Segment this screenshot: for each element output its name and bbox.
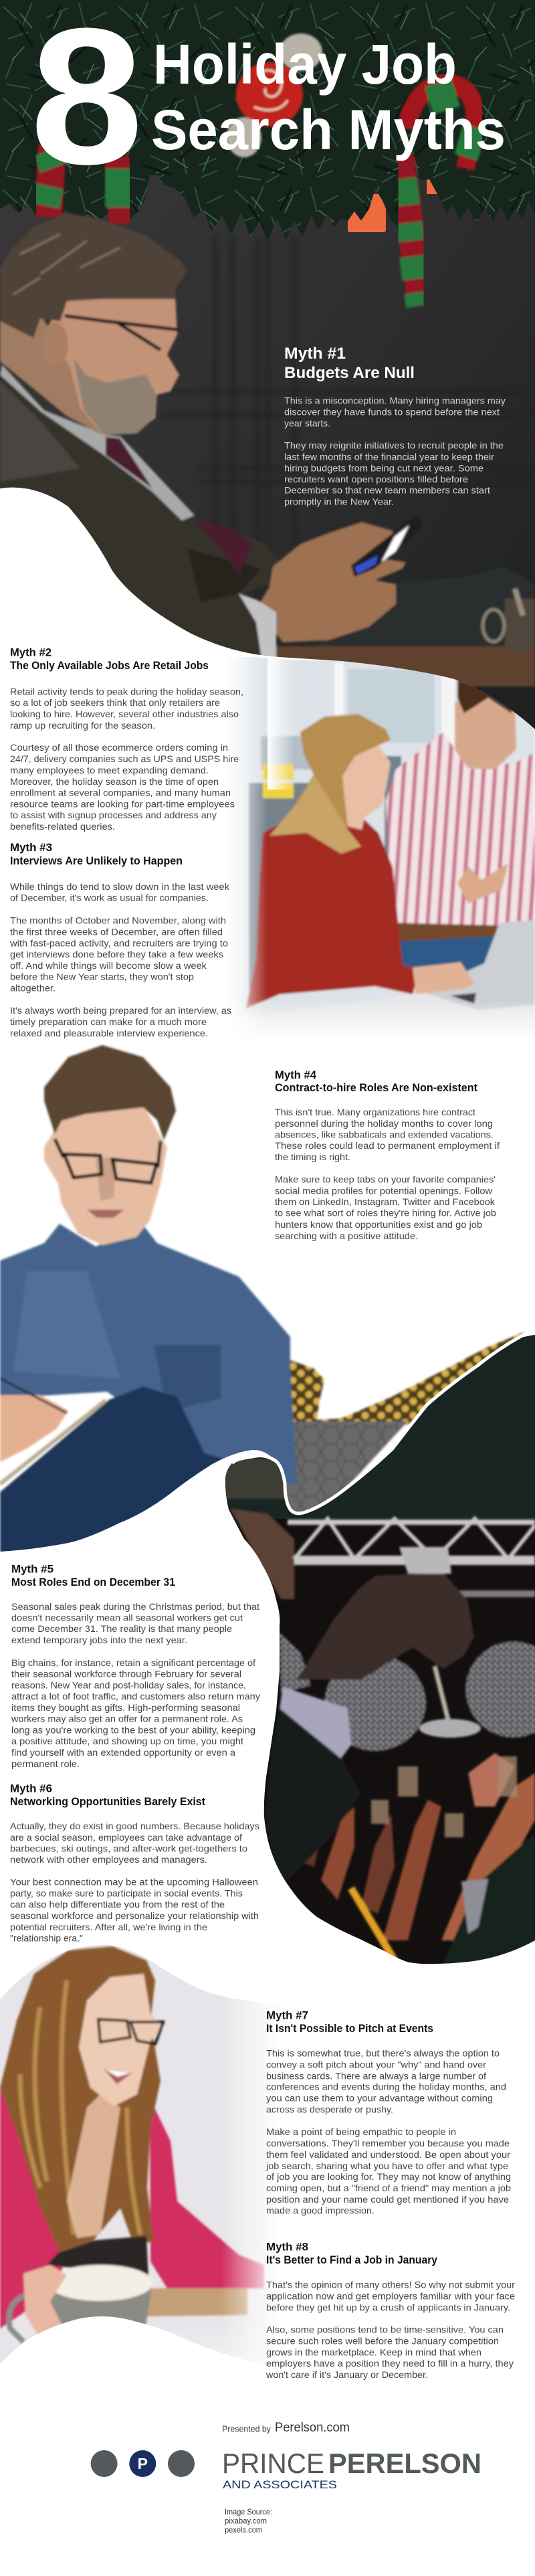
text: myth 7: business cards. There are always a large number of	[266, 2071, 486, 2081]
image source credits: pixabay.com	[225, 2516, 267, 2525]
text: myth 3: Interviews Are Unlikely to Happen	[10, 855, 183, 867]
icon: long candy cane	[401, 156, 421, 306]
text: myth 2: resource teams are looking for part-time employees	[10, 799, 235, 809]
presented by line	[222, 2421, 350, 2435]
disco ball right	[465, 1641, 535, 1738]
wooden table	[276, 646, 535, 686]
text: myth 6: Your best connection may be at the upcoming Halloween	[10, 1877, 258, 1888]
man's face and hair	[453, 680, 518, 771]
ear	[41, 323, 68, 367]
text: myth 5: find yourself with an extended opportunity or even a	[11, 1748, 235, 1758]
suit at lower right	[441, 1833, 535, 1967]
text: myth 1: This is a misconception. Many hiring managers may	[284, 395, 506, 405]
text: myth 5: a positive attitude, and showing up on time, you might	[11, 1736, 243, 1746]
suit jacket	[0, 371, 283, 662]
shirt cuff	[239, 593, 276, 662]
black top	[47, 2236, 148, 2277]
text: myth 4: Myth #4	[275, 1069, 317, 1081]
glasses	[65, 316, 179, 350]
glasses	[55, 1139, 160, 1183]
text: myth 6	[10, 1782, 259, 1943]
text: myth 8: Also, some positions tend to be time-sensitive. You can	[266, 2325, 504, 2335]
text: myth 4: These roles could lead to permanent employment if	[275, 1141, 500, 1151]
raised glasses in crowd	[371, 1756, 517, 1837]
logo: Prince Perelson and Associates	[91, 2448, 481, 2491]
phone	[351, 517, 421, 577]
text: myth 1: Myth #1	[284, 345, 346, 363]
text: myth 6: party, so make sure to participate in social events. This	[10, 1889, 243, 1899]
suit sleeve	[264, 1708, 361, 1887]
text: myth 8: secure such roles well before the January competition	[266, 2336, 499, 2347]
text: myth 5: doesn't necessarily mean all seasonal workers get cut	[11, 1613, 243, 1623]
text: myth 4: Contract-to-hire Roles Are Non-existent	[275, 1082, 477, 1094]
photo: young man with glasses writing	[0, 1045, 526, 1566]
text: myth 2: ramp up recruiting for the season.	[10, 721, 155, 731]
text: myth 7: It Isn't Possible to Pitch at Events	[266, 2023, 433, 2035]
face	[44, 1104, 167, 1245]
shirt collar and front	[0, 365, 195, 521]
honeycomb chair	[278, 1331, 526, 1519]
text: myth 1: year starts.	[284, 418, 330, 428]
text: myth 5: extend temporary jobs into the next year.	[11, 1635, 187, 1645]
laptop	[421, 920, 535, 1010]
text: myth 2: looking to hire. However, several other industries also	[10, 709, 239, 719]
text: myth 1	[284, 345, 506, 507]
icon: left candy canes	[44, 145, 122, 224]
text: myth 4: hunters know that opportunities exist and go job	[275, 1220, 482, 1230]
text: myth 8: before they get hit up by a crush of applicants in January.	[266, 2302, 510, 2312]
hand on mug	[23, 2265, 67, 2338]
striped shirt	[386, 732, 535, 925]
text: myth 6: barbecues, ski outings, and after-work get-togethers to	[10, 1843, 247, 1853]
text: myth 5: Most Roles End on December 31	[11, 1576, 175, 1588]
hair	[0, 213, 187, 338]
text: myth 7: position and your name could get mentioned if you have	[266, 2195, 509, 2205]
eyeglasses	[98, 2019, 163, 2044]
text: myth 5: workers may also get an offer for a permanent role. As	[11, 1714, 243, 1724]
logo wordmark: AND ASSOCIATES	[223, 2479, 337, 2491]
text: myth 2	[10, 647, 243, 832]
text: myth 4: searching with a positive attitude.	[275, 1231, 418, 1241]
text: myth 5	[11, 1564, 260, 1769]
text: myth 6: Myth #6	[10, 1782, 52, 1795]
text: myth 3: with fast-paced activity, and recruiters are trying to	[9, 938, 228, 948]
text: myth 7: coming open, but a "friend of a friend" may mention a job	[266, 2183, 511, 2193]
text: myth 2: The Only Available Jobs Are Retail Jobs	[10, 660, 209, 672]
text: myth 3: The months of October and November, along with	[10, 915, 226, 925]
hair	[0, 1946, 160, 2256]
text: myth 6: can also help differentiate you from the rest of the	[10, 1900, 225, 1910]
text: myth 2: Moreover, the holiday season is the time of open	[10, 777, 219, 787]
text: myth 2: to assist with signup processes and address any	[10, 810, 217, 820]
text: myth 3: of December, it's work as usual for companies.	[10, 893, 209, 903]
man's trousers	[314, 567, 535, 647]
text: myth 3: timely preparation can make for a much more	[10, 1017, 207, 1027]
garland with candy canes	[0, 0, 535, 306]
woman's hair	[280, 713, 392, 828]
text: myth 7: conversations. They'll remember you because you made	[266, 2138, 510, 2148]
presented by line: Presented by	[222, 2425, 272, 2434]
text: myth 1: discover they have funds to spend before the next	[284, 407, 500, 417]
brown blurred foreground in lobe	[225, 1459, 288, 1499]
text: myth 4: This isn't true. Many organizations hire contract	[275, 1107, 475, 1117]
text: myth 1: last few months of the financial year to keep their	[284, 452, 494, 462]
text: myth 5: items they bought as gifts. High-performing seasonal	[11, 1703, 240, 1713]
text: myth 6: network with other employees and managers.	[10, 1855, 207, 1865]
text: myth 2: enrollment at several companies, and many human	[10, 788, 231, 798]
text: myth 5: Seasonal sales peak during the Christmas period, but that	[11, 1602, 259, 1612]
photo: woman and man at laptop	[227, 656, 535, 1054]
text: myth 3: off. And while things will become slow a week	[10, 961, 207, 971]
text: myth 4: social media profiles for potential openings. Follow	[275, 1186, 492, 1196]
text: myth 7: of job you are looking for. They may not know of anything	[266, 2172, 511, 2182]
text: myth 1: recruiters want open positions filled before	[284, 474, 468, 484]
champagne glass	[399, 1547, 481, 1738]
text: myth 3: It's always worth being prepared for an interview, as	[10, 1006, 231, 1016]
text: myth 4: personnel during the holiday months to cover long	[275, 1119, 493, 1129]
text: myth 2: 24/7, delivery companies such as UPS and USPS hire	[10, 754, 239, 764]
text: myth 3	[9, 842, 231, 1038]
panel: header and myth 1 dark room photo	[0, 0, 535, 743]
necktie	[106, 437, 253, 575]
lighting truss	[288, 1519, 535, 1594]
text: myth 6: "relationship era."	[10, 1933, 83, 1943]
jeans leg	[0, 1386, 268, 1566]
text: myth 8: won't care if it's January or December.	[265, 2370, 428, 2380]
image source credits	[225, 2507, 272, 2535]
logo mark: three dots: P	[138, 2455, 148, 2472]
glass cup	[483, 589, 535, 651]
photo: smiling woman with mug	[0, 1940, 281, 2382]
text: myth 8: employers have a position they need to fill in a hurry, they	[266, 2359, 514, 2369]
text: myth 7: across as desperate or pushy.	[266, 2105, 393, 2115]
text: myth 7: them feel validated and understood. Be open about your	[266, 2150, 511, 2160]
text: myth 7: This is somewhat true, but there's always the option to	[266, 2048, 500, 2058]
text: myth 1: December so that new team members can start	[284, 486, 490, 496]
text: myth 7: conferences and events during the holiday months, and	[266, 2082, 506, 2092]
text: myth 6: Networking Opportunities Barely Exist	[10, 1796, 205, 1808]
text: myth 7: job search, sharing what you have to offer and what type	[265, 2161, 508, 2171]
presented by line: Perelson.com	[275, 2421, 350, 2435]
text: myth 3: get interviews done before they take a few weeks	[10, 949, 223, 959]
text: myth 5: attract a lot of foot traffic, and customers also return many	[11, 1691, 260, 1701]
logo mark: three dots	[91, 2450, 195, 2477]
woman's face	[342, 746, 391, 830]
hair	[44, 1045, 176, 1140]
icon: candy cane hook	[406, 83, 475, 169]
text: myth 2: Retail activity tends to peak during the holiday season,	[10, 686, 243, 697]
text: myth 1: They may reignite initiatives to recruit people in the	[284, 441, 504, 451]
text: myth 8	[265, 2241, 515, 2380]
image source credits: pexels.com	[225, 2525, 262, 2535]
logo wordmark	[222, 2448, 481, 2491]
text: myth 4: absences, like sabbaticals and extended vacations.	[275, 1129, 494, 1139]
text: myth 6: Actually, they do exist in good numbers. Because holidays	[10, 1821, 259, 1831]
icon: red wrapped candy	[236, 62, 303, 126]
hand holding glass	[297, 1573, 474, 1679]
text: myth 7: convey a soft pitch about your "why" and hand over	[266, 2059, 486, 2069]
white wave shape behind myth 2	[0, 488, 535, 1050]
icon: white candy pieces	[227, 33, 322, 157]
text: myth 2: Myth #2	[10, 647, 51, 659]
pink blazer	[0, 2088, 264, 2328]
text: myth 5: long as you're working to the best of your ability, keeping	[11, 1726, 255, 1736]
text: myth 7: you can use them to your advantage without coming	[266, 2094, 493, 2104]
text: myth 1: promptly in the New Year.	[284, 497, 394, 507]
text: myth 3: relaxed and pleasurable interview experience.	[10, 1028, 208, 1038]
title line 1: Holiday Job	[153, 33, 457, 96]
yellow sticky notes	[263, 764, 294, 798]
text: myth 5: Big chains, for instance, retain a significant percentage of	[11, 1658, 255, 1668]
table	[144, 2285, 247, 2316]
logo wordmark: PRINCE	[222, 2448, 324, 2479]
hand	[256, 522, 406, 642]
text: myth 6: seasonal workforce and personalize your relationship with	[10, 1911, 259, 1921]
man's jeans and belt	[393, 923, 498, 974]
crowd arms and hands	[294, 1753, 535, 1940]
title line 2: Search Myths	[151, 98, 506, 161]
woman's sweater	[245, 814, 420, 1009]
text: myth 4: Make sure to keep tabs on your favorite companies'	[275, 1175, 496, 1184]
text: myth 2: so a lot of job seekers think that only retailers are	[10, 698, 220, 708]
text: myth 4: to see what sort of roles they're hiring for. Active job	[275, 1208, 496, 1218]
text: myth 8: grows in the marketplace. Keep in mind that when	[266, 2348, 481, 2358]
text: myth 5: their seasonal workforce through February for several	[11, 1669, 241, 1679]
text: myth 7: made a good impression.	[266, 2205, 374, 2216]
text: myth 3: While things do tend to slow down in the last week	[10, 882, 229, 892]
text: myth 8: It's Better to Find a Job in January	[266, 2254, 438, 2266]
hair over shoulder	[270, 776, 361, 854]
white wave line over party photo	[232, 1333, 535, 1513]
photo: party crowd with raised glasses	[214, 1325, 535, 1967]
beard	[74, 358, 157, 435]
text: myth 5: reasons. New Year and post-holiday sales, for instance,	[11, 1680, 246, 1690]
text: myth 8: Myth #8	[266, 2241, 308, 2253]
photo: man in suit with phone	[0, 213, 535, 686]
text: myth 5: Myth #5	[11, 1564, 54, 1576]
text: myth 3: altogether.	[10, 984, 56, 994]
woman's hand	[413, 962, 474, 994]
text: myth 8: That's the opinion of many others! So why not submit your	[266, 2280, 515, 2290]
text: myth 8: application now and get employers familiar with your face	[266, 2291, 515, 2301]
text: myth 5: permanent role.	[11, 1759, 80, 1769]
text: myth 6: are a social season, employees can take advantage of	[10, 1833, 242, 1843]
yellow light streak	[351, 1888, 395, 1960]
face	[47, 294, 179, 435]
denim shirt	[0, 1224, 297, 1485]
text: myth 7	[265, 2010, 511, 2216]
image source credits: Image Source:	[225, 2507, 272, 2516]
neck	[0, 314, 102, 435]
text: myth 4: them on LinkedIn, Instagram, Twitter and Facebook	[275, 1197, 495, 1207]
text: myth 3: the first three weeks of December, are often filled	[10, 927, 223, 937]
text: myth 6: potential recruiters. After all, we're living in the	[10, 1922, 207, 1932]
text: myth 2: Courtesy of all those ecommerce orders coming in	[10, 743, 228, 753]
text: myth 3: Myth #3	[10, 842, 52, 854]
disco ball left	[324, 1655, 426, 1751]
text: myth 7: Make a point of being empathic to people in	[266, 2127, 456, 2137]
text: myth 1: hiring budgets from being cut next year. Some	[284, 463, 484, 473]
text: myth 1: Budgets Are Null	[284, 364, 415, 382]
coffee mug	[9, 2265, 153, 2342]
text: myth 3: before the New Year starts, they won't stop	[10, 972, 194, 982]
face	[79, 1974, 164, 2106]
text: myth 4	[275, 1069, 500, 1241]
disco ball small	[280, 1633, 311, 1693]
text: myth 2: many employees to meet expanding demand.	[10, 765, 209, 775]
shirt cuff	[280, 1687, 351, 1758]
notebook edge	[0, 1400, 106, 1484]
smile	[104, 2069, 132, 2084]
hand and pen	[0, 1378, 68, 1462]
logo wordmark: PERELSON	[328, 2448, 481, 2479]
title	[30, 0, 506, 205]
text: myth 7: Myth #7	[266, 2010, 308, 2022]
text: myth 2: benefits-related queries.	[10, 822, 115, 832]
text: myth 5: come December 31. The reality is that many people	[11, 1624, 232, 1634]
table	[325, 994, 534, 1012]
text: myth 4: the timing is right.	[275, 1152, 350, 1162]
mouth	[87, 1210, 124, 1218]
man's hand	[457, 863, 508, 903]
